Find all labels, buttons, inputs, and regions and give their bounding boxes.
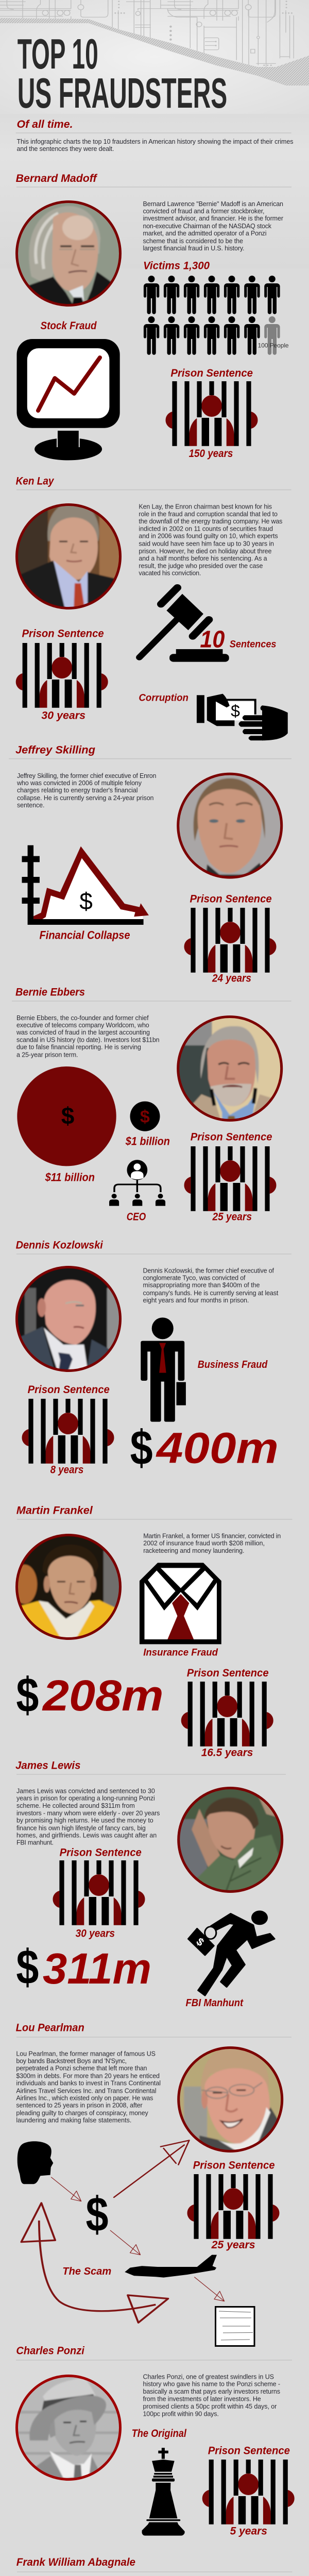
- corruption label: Corruption: [139, 693, 188, 704]
- prison sentence: Prison Sentence: [191, 1131, 272, 1143]
- victims pictogram: 100 People: [258, 342, 289, 349]
- biography: scheme. He collected around $311m from: [16, 1802, 135, 1809]
- biography: Charles Ponzi, one of greatest swindlers in US: [143, 2374, 274, 2381]
- prison sentence: Prison Sentence: [22, 628, 104, 640]
- intro background: [0, 114, 309, 268]
- biography: [143, 2374, 280, 2418]
- icon: shirt and tie: [140, 1563, 221, 1644]
- biography: the downfall of the energy trading company. He was: [139, 518, 282, 525]
- biography: Airlines Travel Services Inc. and Trans Continental: [16, 2088, 157, 2095]
- panel: Lou Pearlman: [16, 2022, 291, 2346]
- panel: Charles Ponzi: [14, 2345, 295, 2537]
- icon: running man with money bag: $: [194, 1936, 206, 1948]
- stock fraud label: Stock Fraud: [40, 320, 97, 332]
- biography: who was convicted in 2006 of multiple felony: [16, 779, 142, 787]
- biography: history who gave his name to the Ponzi scheme -: [143, 2381, 280, 2388]
- biography: Jeffrey Skilling, the former chief executive of Enron: [17, 772, 157, 779]
- portrait: [176, 1014, 284, 1123]
- biography: market, and the admitted operator of a Ponzi: [143, 230, 267, 237]
- chart: 1 billion circle: [130, 1101, 160, 1131]
- panel: Bernie Ebbers: [12, 987, 291, 1223]
- victims pictogram: [144, 276, 289, 355]
- FBI manhunt label: FBI Manhunt: [185, 1997, 244, 2009]
- biography: [16, 1788, 160, 1846]
- icon: running man with money bag: [188, 1910, 274, 1995]
- biography: promised clients a 50pc profit within 45 days, or: [143, 2403, 277, 2410]
- prison sentence: Prison Sentence: [170, 367, 253, 379]
- biography: [143, 200, 283, 252]
- biography: from the investments of later investors. He: [143, 2396, 261, 2403]
- heading: Jeffrey Skilling: [15, 744, 95, 756]
- biography: racketeering and money laundering.: [143, 1547, 244, 1554]
- biography: Bernie Ebbers, the co-founder and former chief: [16, 1014, 149, 1022]
- biography: laundering and making false statements.: [16, 2117, 131, 2124]
- icon: bribe money: [197, 694, 288, 740]
- panel: Bernard Madoff: [14, 173, 291, 460]
- amount: 208m: $: [16, 1668, 39, 1723]
- biography: company's funds. He is currently serving at least: [143, 1290, 279, 1297]
- prison sentence: Prison Sentence: [193, 2159, 275, 2171]
- biography: largest financial fraud in U.S. history.: [143, 245, 244, 252]
- biography: result, the judge who presided over the case: [139, 563, 263, 570]
- heading: Ken Lay: [16, 476, 55, 487]
- prison sentence: 8 years: [50, 1464, 83, 1476]
- biography: eight years and four months in prison.: [143, 1297, 249, 1304]
- icon: dollar sign: $: [79, 888, 93, 914]
- prison sentence: Prison Sentence: [190, 893, 272, 905]
- chart: financial collapse: [22, 845, 149, 925]
- biography: charges relating to energy trader's financial: [17, 787, 138, 794]
- portrait: [14, 2374, 123, 2482]
- icon: chess king: [142, 2448, 185, 2536]
- biography: [143, 1533, 281, 1554]
- amount: 400m: 400m: [156, 1423, 279, 1472]
- intro text: This infographic charts the top 10 fraudsters in American history showing the impact of their crimes: [16, 138, 294, 145]
- panel: Ken Lay: [14, 476, 291, 740]
- icon: document: [215, 2307, 254, 2346]
- heading: Lou Pearlman: [16, 2022, 84, 2034]
- panel: James Lewis: [15, 1759, 286, 2009]
- prison sentence: 25 years: [212, 1211, 252, 1223]
- biography: 100pc profit within 90 days.: [143, 2411, 219, 2418]
- biography: [16, 1014, 160, 1059]
- icon: org chart: [109, 1160, 165, 1206]
- biography: investors - many whom were elderly - over 20 years: [16, 1810, 160, 1817]
- icon: head silhouette: [18, 2141, 53, 2184]
- prison sentence: [165, 367, 258, 460]
- biography: and a half months before his sentencing. As a: [139, 555, 267, 562]
- title: [18, 30, 227, 117]
- prison sentence: 16.5 years: [201, 1747, 253, 1759]
- portrait: [14, 1265, 123, 1373]
- prison sentence: Prison Sentence: [208, 2445, 290, 2456]
- heading: Frank William Abagnale: [16, 2556, 135, 2568]
- icon: bribe money: $: [231, 702, 240, 720]
- biography: [16, 2050, 161, 2124]
- biography: Ken Lay, the Enron chairman best known for his: [139, 503, 272, 511]
- prison sentence: Prison Sentence: [28, 1384, 110, 1396]
- panel: Jeffrey Skilling: [9, 744, 291, 985]
- biography: conglomerate Tyco, was convicted of: [143, 1275, 246, 1282]
- biography: perpetrated a Ponzi scheme that left more than: [16, 2065, 147, 2072]
- heading: James Lewis: [15, 1759, 80, 1771]
- amount: 400m: [130, 1421, 279, 1476]
- insurance fraud label: Insurance Fraud: [143, 1647, 218, 1658]
- icon: gavel: [140, 588, 229, 662]
- icon: airplane: [125, 2255, 217, 2278]
- prison sentence: 30 years: [41, 710, 85, 722]
- intro text: and the sentences they were dealt.: [16, 145, 114, 152]
- panel: Dennis Kozlowski: [14, 1239, 291, 1476]
- prison sentence: [184, 1131, 277, 1223]
- chart: 11 billion circle: [17, 1066, 116, 1166]
- icon: dollar sign: $: [85, 2188, 108, 2242]
- biography: misappropriating more than $400m of the: [143, 1282, 260, 1289]
- prison sentence: [53, 1847, 145, 1939]
- portrait: [176, 2045, 284, 2154]
- portrait: [14, 502, 123, 611]
- portrait: [176, 772, 284, 880]
- icon: stock monitor: [16, 339, 120, 460]
- biography: indicted in 2002 on 11 counts of securities fraud: [139, 526, 273, 533]
- prison sentence: 150 years: [189, 448, 233, 460]
- biography: was convicted of fraud in the largest accounting: [16, 1029, 150, 1036]
- biography: [139, 503, 282, 577]
- biography: basically a scam that pays early investors returns: [143, 2388, 280, 2395]
- prison sentence: Prison Sentence: [60, 1847, 142, 1859]
- biography: James Lewis was convicted and sentenced to 30: [16, 1788, 155, 1795]
- biography: executive of telecoms company Worldcom, who: [16, 1022, 149, 1029]
- biography: [16, 772, 157, 809]
- 10 sentences: 10: [200, 626, 225, 653]
- prison sentence: 30 years: [76, 1927, 115, 1939]
- biography: Martin Frankel, a former US financier, convicted in: [143, 1533, 281, 1540]
- financial collapse label: Financial Collapse: [39, 929, 130, 942]
- the original label: The Original: [132, 2428, 187, 2439]
- prison sentence: [187, 2159, 280, 2251]
- 1 billion label: $1 billion: [125, 1135, 170, 1148]
- biography: investment advisor, and financier. He is the former: [143, 215, 283, 222]
- portrait: [176, 1786, 284, 1894]
- victims heading: Victims 1,300: [143, 260, 210, 272]
- 10 sentences: [200, 626, 276, 653]
- biography: sentence.: [17, 802, 44, 809]
- heading: Bernie Ebbers: [15, 987, 85, 998]
- biography: Airlines Inc., which existed only on paper. He was: [16, 2095, 153, 2102]
- business fraud label: Business Fraud: [198, 1359, 268, 1370]
- prison sentence: 25 years: [211, 2239, 255, 2251]
- prison sentence: [16, 628, 108, 722]
- biography: Lou Pearlman, the former manager of famous US: [16, 2050, 156, 2058]
- biography: convicted of fraud and a former stockbroker,: [143, 208, 265, 215]
- heading: Charles Ponzi: [16, 2345, 85, 2357]
- the scam label: The Scam: [62, 2266, 111, 2277]
- portrait: [14, 199, 123, 308]
- biography: scandal in US history (to date). Investors lost $11bn: [16, 1037, 160, 1044]
- prison sentence: [181, 1667, 273, 1759]
- biography: pleading guilty to charges of conspiracy, money: [16, 2110, 149, 2117]
- biography: individuals and banks to invest in Trans Continental: [16, 2080, 161, 2087]
- chart: 1 billion circle: $: [140, 1107, 150, 1127]
- biography: homes, and girlfriends. Lewis was caught after an: [16, 1832, 157, 1839]
- chart: 11 billion circle: $: [61, 1103, 74, 1129]
- biography: FBI manhunt.: [16, 1839, 54, 1846]
- CEO label: CEO: [127, 1211, 146, 1223]
- amount: 311m: 311m: [43, 1944, 151, 1993]
- biography: Dennis Kozlowski, the former chief executive of: [143, 1267, 274, 1275]
- prison sentence: 5 years: [230, 2525, 267, 2537]
- heading: Bernard Madoff: [16, 173, 98, 184]
- amount: 208m: [16, 1668, 164, 1723]
- amount: 208m: 208m: [42, 1671, 164, 1720]
- biography: non-executive Chairman of the NASDAQ stock: [143, 223, 272, 230]
- amount: 400m: $: [130, 1421, 153, 1476]
- arrows: scam flow: [21, 2140, 225, 2323]
- biography: scheme that is considered to be the: [143, 238, 243, 245]
- biography: role in the fraud and corruption scandal that led to: [139, 511, 278, 518]
- biography: a 25-year prison term.: [16, 1052, 78, 1059]
- biography: said would have seen him face up to 30 years in: [139, 540, 274, 548]
- icon: businessman: [141, 1317, 186, 1422]
- intro text: [16, 138, 294, 152]
- biography: years in prison for operating a long-running Ponzi: [16, 1795, 155, 1802]
- portrait: [12, 1533, 123, 1641]
- subtitle: Of all time.: [16, 118, 73, 130]
- 11 billion label: $11 billion: [45, 1171, 95, 1184]
- biography: due to false financial reporting. He is serving: [16, 1044, 141, 1051]
- biography: prison. However, he died on holiday about three: [139, 548, 271, 555]
- biography: [143, 1267, 279, 1304]
- biography: collapse. He is currently serving a 24-year prison: [17, 794, 154, 802]
- prison sentence: [184, 893, 277, 985]
- heading: Dennis Kozlowski: [16, 1239, 104, 1251]
- biography: sentenced to 25 years in prison in 2008, after: [16, 2102, 143, 2109]
- biography: boy bands Backstreet Boys and 'N'Sync,: [16, 2058, 127, 2065]
- panel: Martin Frankel: [12, 1504, 293, 1759]
- header circuit pattern: [0, 0, 294, 69]
- header background: [0, 0, 309, 114]
- biography: 2002 of insurance fraud worth $208 million,: [143, 1540, 265, 1547]
- prison sentence: [22, 1384, 114, 1476]
- amount: 311m: $: [16, 1940, 39, 1995]
- biography: finance his own high lifestyle of fancy cars, big: [16, 1825, 146, 1832]
- prison sentence: [202, 2445, 295, 2537]
- biography: by promising high returns. He used the money to: [16, 1817, 153, 1824]
- 10 sentences: Sentences: [230, 639, 276, 650]
- prison sentence: 24 years: [212, 973, 251, 985]
- header hatch band: [0, 18, 309, 86]
- heading: Martin Frankel: [16, 1504, 93, 1516]
- prison sentence: Prison Sentence: [187, 1667, 269, 1679]
- title: TOP 10: [18, 30, 98, 78]
- biography: and in 2006 was found guilty on 10, which experts: [139, 533, 278, 540]
- biography: vacated his conviction.: [139, 570, 201, 577]
- biography: Bernard Lawrence "Bernie" Madoff is an American: [143, 200, 283, 208]
- biography: $300m in debts. For more than 20 years he enticed: [16, 2073, 160, 2080]
